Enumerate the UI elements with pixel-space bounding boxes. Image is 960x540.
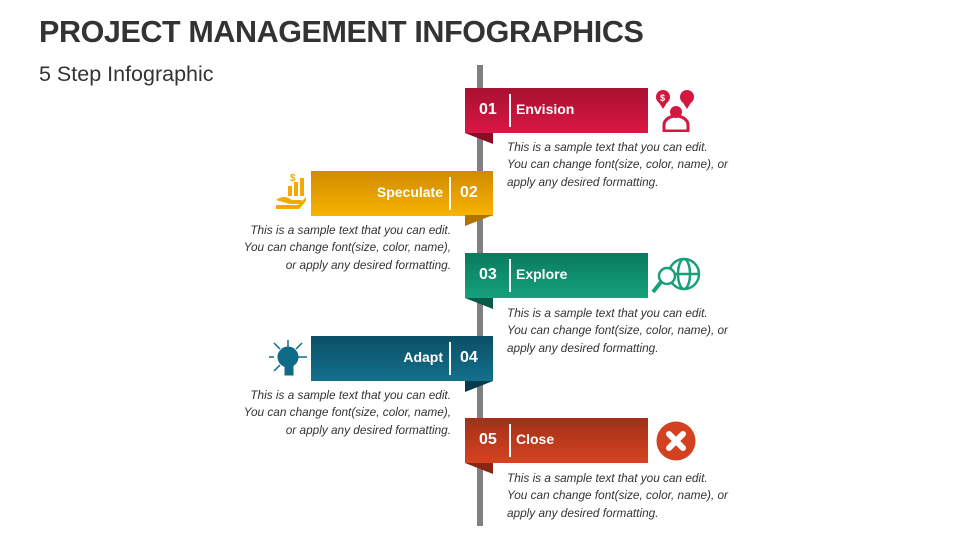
- icon: speculate: [276, 173, 306, 209]
- timeline line: [477, 65, 483, 526]
- step 03 banner: 03: [479, 266, 497, 283]
- icon: speculate: $: [290, 173, 296, 184]
- fold 05: [465, 463, 493, 474]
- step 05 banner: [465, 418, 648, 463]
- text 04: This is a sample text that you can edit.: [250, 388, 451, 402]
- step 04 banner: 04: [460, 349, 478, 366]
- icon: envision: [656, 90, 694, 132]
- step 01 banner: Envision: [516, 101, 574, 117]
- fold 04: [465, 381, 493, 392]
- text 03: apply any desired formatting.: [507, 341, 658, 355]
- step 04 banner: Adapt: [403, 349, 443, 365]
- text 03: [507, 306, 728, 355]
- step 03 banner: Explore: [516, 266, 567, 282]
- step 02 banner: Speculate: [377, 184, 443, 200]
- step 04 banner: [311, 336, 493, 381]
- text 02: or apply any desired formatting.: [286, 258, 451, 272]
- text 01: apply any desired formatting.: [507, 175, 658, 189]
- text 03: This is a sample text that you can edit.: [507, 306, 708, 320]
- step 05 banner: 05: [479, 431, 497, 448]
- title: PROJECT MANAGEMENT INFOGRAPHICS: [39, 15, 643, 49]
- fold 01: [465, 133, 493, 144]
- step 03 banner: [465, 253, 648, 298]
- text 04: or apply any desired formatting.: [286, 423, 451, 437]
- icon: adapt: [269, 340, 307, 376]
- text 02: You can change font(size, color, name),: [244, 240, 451, 254]
- step 01 banner: 01: [479, 101, 497, 118]
- text 02: [244, 223, 451, 272]
- step 02 banner: [311, 171, 493, 216]
- text 03: You can change font(size, color, name), or: [507, 323, 728, 337]
- subtitle: 5 Step Infographic: [39, 62, 214, 86]
- text 01: This is a sample text that you can edit.: [507, 140, 708, 154]
- text 01: [507, 140, 728, 189]
- step 01 banner: [465, 88, 648, 133]
- text 05: apply any desired formatting.: [507, 506, 658, 520]
- icon: explore: [652, 258, 700, 294]
- icon: close: [656, 422, 696, 460]
- text 05: You can change font(size, color, name), or: [507, 488, 728, 502]
- text 05: [507, 471, 728, 520]
- text 02: This is a sample text that you can edit.: [250, 223, 451, 237]
- text 04: You can change font(size, color, name),: [244, 405, 451, 419]
- text 04: [244, 388, 451, 437]
- step 02 banner: 02: [460, 184, 478, 201]
- icon: envision: $: [660, 93, 665, 103]
- text 01: You can change font(size, color, name), or: [507, 157, 728, 171]
- fold 02: [465, 215, 493, 226]
- fold 03: [465, 298, 493, 309]
- step 05 banner: Close: [516, 431, 554, 447]
- text 05: This is a sample text that you can edit.: [507, 471, 708, 485]
